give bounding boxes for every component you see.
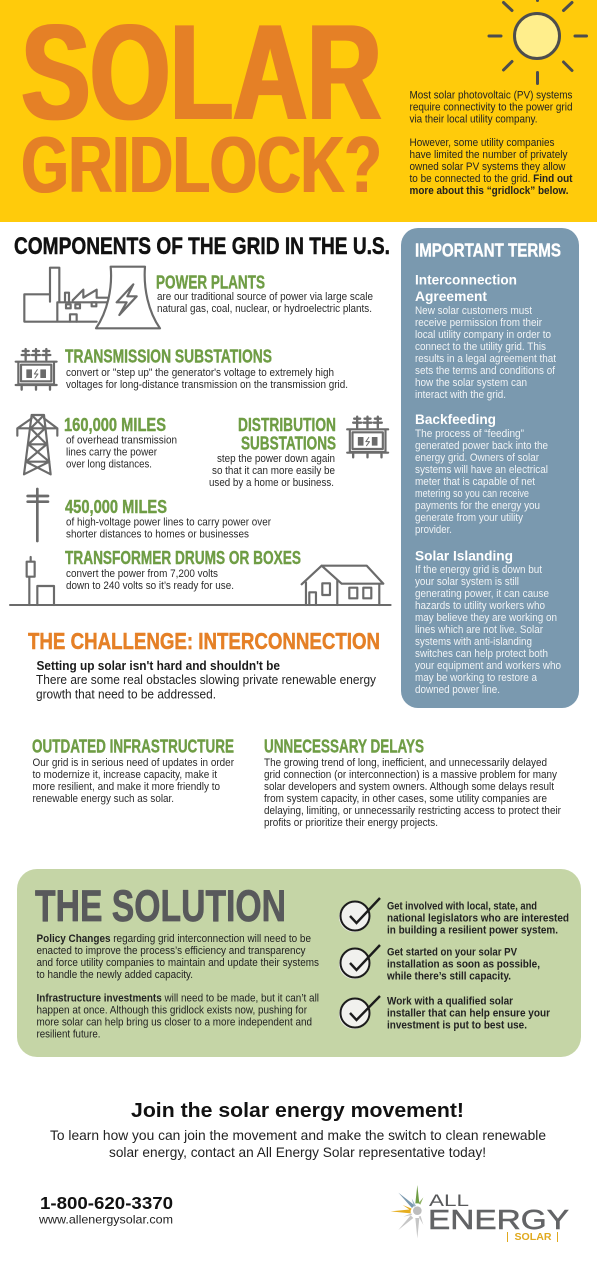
section: outdated infrastructure: OUTDATED INFRASTRUCTURE	[32, 736, 234, 756]
text: policy changes: to handle the newly added capacity.	[36, 969, 193, 981]
check item 2: installation as soon as possible,	[387, 958, 540, 970]
intro text: require connectivity to the power grid	[410, 102, 573, 114]
challenge intro: growth that need to be addressed.	[36, 688, 216, 702]
icon: power plants	[24, 267, 160, 328]
intro text: owned solar PV systems they allow	[410, 161, 566, 173]
term: backfeeding: Backfeeding	[415, 411, 496, 427]
term: solar islanding: If the energy grid is down but	[415, 564, 542, 576]
check item 2: while there’s still capacity.	[386, 970, 511, 982]
intro text: Most solar photovoltaic (PV) systems	[410, 90, 572, 102]
title: Gridlock?: GRIDLOCK?	[22, 120, 382, 209]
term: solar islanding: may believe they are working on	[415, 612, 557, 624]
term: interconnection agreement: Interconnection	[415, 272, 517, 288]
challenge intro	[36, 659, 377, 702]
panel heading: IMPORTANT TERMS	[415, 240, 561, 260]
section: unnecessary delays: The growing trend of long, inefficient, and unnecessarily delayed	[264, 757, 547, 769]
section: unnecessary delays: profits or prioritize their energy projects.	[264, 817, 438, 829]
challenge intro: Setting up solar isn't hard and shouldn't be	[36, 659, 280, 673]
component: 160,000 miles: 160,000 MILES	[64, 415, 166, 435]
term: backfeeding: payments for the energy you	[415, 500, 540, 512]
text: policy changes: and force utility companies to maintain and update their systems	[36, 957, 319, 969]
intro text: have limited the number of privately	[410, 149, 568, 161]
component: distribution substations	[209, 415, 336, 489]
term: interconnection agreement	[415, 272, 556, 401]
icon: transformer and ground line	[10, 557, 391, 605]
icon: sun	[489, 0, 586, 84]
component: distribution substations: used by a home or business.	[209, 477, 334, 489]
term: interconnection agreement: sets the terms and conditions of	[415, 365, 556, 377]
term: backfeeding: energy grid. Owners of solar	[415, 452, 539, 464]
panel: important terms	[401, 228, 579, 708]
intro text: more about this “gridlock” below.	[410, 185, 569, 197]
icon: distribution substation	[347, 417, 388, 457]
icon: utility pole	[28, 489, 48, 541]
section: unnecessary delays: from system capacity, in other cases, some utility companies are	[264, 793, 547, 805]
icon: house	[302, 566, 383, 605]
term: backfeeding: systems will have an electrical	[415, 464, 548, 476]
contact details: www.allenergysolar.com	[38, 1212, 173, 1226]
check item 3: Work with a qualified solar	[387, 996, 513, 1008]
component: 160,000 miles: lines carry the power	[66, 446, 157, 458]
term: interconnection agreement: receive permission from their	[415, 317, 542, 329]
term: solar islanding: may be working to restore a	[415, 672, 537, 684]
check item 1: Get involved with local, state, and	[387, 900, 537, 912]
call to action text: To learn how you can join the movement and make the switch to clean renewable	[50, 1127, 546, 1143]
text: infrastructure investments: happen at once. Although this gridlock exists now, pushing for	[36, 1004, 307, 1016]
component: 450,000 miles: 450,000 MILES	[65, 497, 167, 517]
component: power plants: POWER PLANTS	[156, 272, 265, 292]
section: unnecessary delays: delaying, limiting, or unnecessarily restricting access to protect their	[264, 805, 561, 817]
heading: the challenge: THE CHALLENGE: INTERCONNECTION	[28, 628, 380, 654]
text: infrastructure investments	[36, 992, 319, 1040]
icon: check 3	[339, 996, 380, 1029]
icon: transmission tower	[17, 415, 57, 474]
component: transmission substations: TRANSMISSION SUBSTATIONS	[65, 346, 272, 366]
text: policy changes: enacted to improve the process’s efficiency and transparency	[36, 945, 306, 957]
check item 2	[386, 946, 540, 982]
component: distribution substations: so that it can more easily be	[212, 465, 335, 477]
panel: the solution	[17, 869, 581, 1057]
term: solar islanding: downed power line.	[415, 684, 500, 696]
logo: all energy solar	[391, 1185, 569, 1243]
term: solar islanding: lines which are not live. Solar	[415, 624, 543, 636]
check item 2: Get started on your solar PV	[387, 946, 517, 958]
term: backfeeding: provider.	[415, 524, 452, 536]
challenge intro: There are some real obstacles slowing private renewable energy	[36, 673, 377, 687]
term: solar islanding	[415, 548, 561, 696]
section: unnecessary delays: UNNECESSARY DELAYS	[264, 736, 424, 756]
component: transformer drums or boxes: TRANSFORMER DRUMS OR BOXES	[65, 548, 301, 568]
term: backfeeding: generated power back into the	[415, 440, 548, 452]
logo wordmark: ALL	[429, 1191, 469, 1210]
term: backfeeding	[415, 411, 548, 536]
term: backfeeding: meter that is capable of net	[415, 476, 535, 488]
solution heading: THE SOLUTION	[35, 882, 286, 931]
term: interconnection agreement: interact with the grid.	[415, 389, 506, 401]
component: distribution substations: DISTRIBUTION	[238, 415, 336, 435]
component: 450,000 miles	[65, 497, 271, 540]
component: 160,000 miles: of overhead transmission	[66, 434, 177, 446]
component: transformer drums or boxes: down to 240 volts so it’s ready for use.	[66, 580, 234, 592]
section: outdated infrastructure	[32, 736, 234, 805]
contact details: 1-800-620-3370	[40, 1193, 173, 1213]
call to action heading: Join the solar energy movement!	[131, 1099, 464, 1122]
component: transformer drums or boxes	[65, 548, 301, 592]
term: solar islanding: Solar Islanding	[415, 548, 513, 564]
check item 1	[387, 900, 569, 936]
logo tagline: SOLAR	[514, 1231, 552, 1243]
component: power plants	[156, 272, 373, 315]
text: policy changes: Policy Changes regarding grid interconnection will need to be	[36, 933, 311, 945]
component: 450,000 miles: of high-voltage power lines to carry power over	[66, 516, 271, 528]
icon: transmission substation	[16, 349, 57, 390]
check item 3: installer that can help ensure your	[387, 1008, 550, 1020]
check item 1: national legislators who are interested	[387, 912, 569, 924]
intro text: to be connected to the grid. Find out	[410, 173, 573, 185]
term: solar islanding: your solar system is still	[415, 576, 519, 588]
term: interconnection agreement: New solar customers must	[415, 305, 532, 317]
component: transformer drums or boxes: convert the power from 7,200 volts	[66, 568, 218, 580]
component: 450,000 miles: shorter distances to homes or businesses	[66, 528, 249, 540]
section: unnecessary delays: solar developers and system owners. Although some delays result	[264, 781, 554, 793]
term: backfeeding: generate from your utility	[415, 512, 524, 524]
intro text	[410, 90, 573, 197]
icon: check 2	[339, 945, 380, 979]
intro text: via their local utility company.	[410, 114, 538, 126]
title: Solar: SOLAR	[22, 0, 382, 148]
component: 160,000 miles	[64, 415, 177, 470]
component: transmission substations: voltages for long-distance transmission on the transmission grid.	[66, 379, 348, 391]
header banner	[0, 0, 597, 222]
section: outdated infrastructure: more resilient, and make it more friendly to	[32, 781, 220, 793]
component: power plants: natural gas, coal, nuclear, or hydroelectric plants.	[157, 303, 372, 315]
check item 3: investment is put to best use.	[387, 1020, 527, 1032]
term: backfeeding: The process of “feeding”	[415, 428, 524, 440]
term: solar islanding: systems with anti-islanding	[415, 636, 532, 648]
intro text: However, some utility companies	[410, 137, 554, 149]
term: solar islanding: switches can help protect both	[415, 648, 548, 660]
call to action text	[50, 1127, 546, 1160]
term: interconnection agreement: connect to the utility grid. This	[415, 341, 547, 353]
section: outdated infrastructure: renewable energy such as solar.	[32, 793, 174, 805]
term: backfeeding: metering so you can receive	[415, 488, 529, 500]
component: 160,000 miles: over long distances.	[66, 458, 152, 470]
text: infrastructure investments: more solar can help bring us closer to a more independent and	[36, 1016, 312, 1028]
term: interconnection agreement: results in a legal agreement that	[415, 353, 556, 365]
component: power plants: are our traditional source of power via large scale	[157, 291, 373, 303]
term: interconnection agreement: how the solar system can	[415, 377, 527, 389]
text: infrastructure investments: resilient future.	[36, 1028, 100, 1040]
term: interconnection agreement: Agreement	[415, 288, 487, 304]
logo star	[391, 1185, 423, 1238]
contact details	[38, 1193, 173, 1226]
call to action text: solar energy, contact an All Energy Solar representative today!	[109, 1144, 486, 1160]
term: solar islanding: your equipment and workers who	[415, 660, 561, 672]
component: distribution substations: step the power down again	[217, 453, 335, 465]
text: policy changes	[36, 933, 319, 981]
section: unnecessary delays	[264, 736, 561, 829]
component: distribution substations: SUBSTATIONS	[241, 434, 336, 454]
term: solar islanding: hazards to utility workers who	[415, 600, 545, 612]
term: solar islanding: generating power, it can cause	[415, 588, 549, 600]
section: outdated infrastructure: Our grid is in serious need of updates in order	[32, 757, 234, 769]
component: transmission substations: convert or "step up" the generator's voltage to extremely high	[66, 367, 334, 379]
section: unnecessary delays: grid connection (or interconnection) is a massive problem for many	[264, 769, 558, 781]
heading: components of the grid: COMPONENTS OF THE GRID IN THE U.S.	[14, 233, 390, 260]
text: infrastructure investments: Infrastructure investments will need to be made, but it can’t all	[36, 992, 319, 1004]
logo: all energy solar: ENERGY	[428, 1204, 569, 1235]
check item 3	[387, 996, 550, 1032]
component: transmission substations	[65, 346, 348, 391]
icon: check 1	[339, 898, 380, 932]
section: outdated infrastructure: to modernize it, increase capacity, make it	[32, 769, 217, 781]
check item 1: in building a resilient power system.	[387, 924, 558, 936]
term: interconnection agreement: local utility company in order to	[415, 329, 551, 341]
